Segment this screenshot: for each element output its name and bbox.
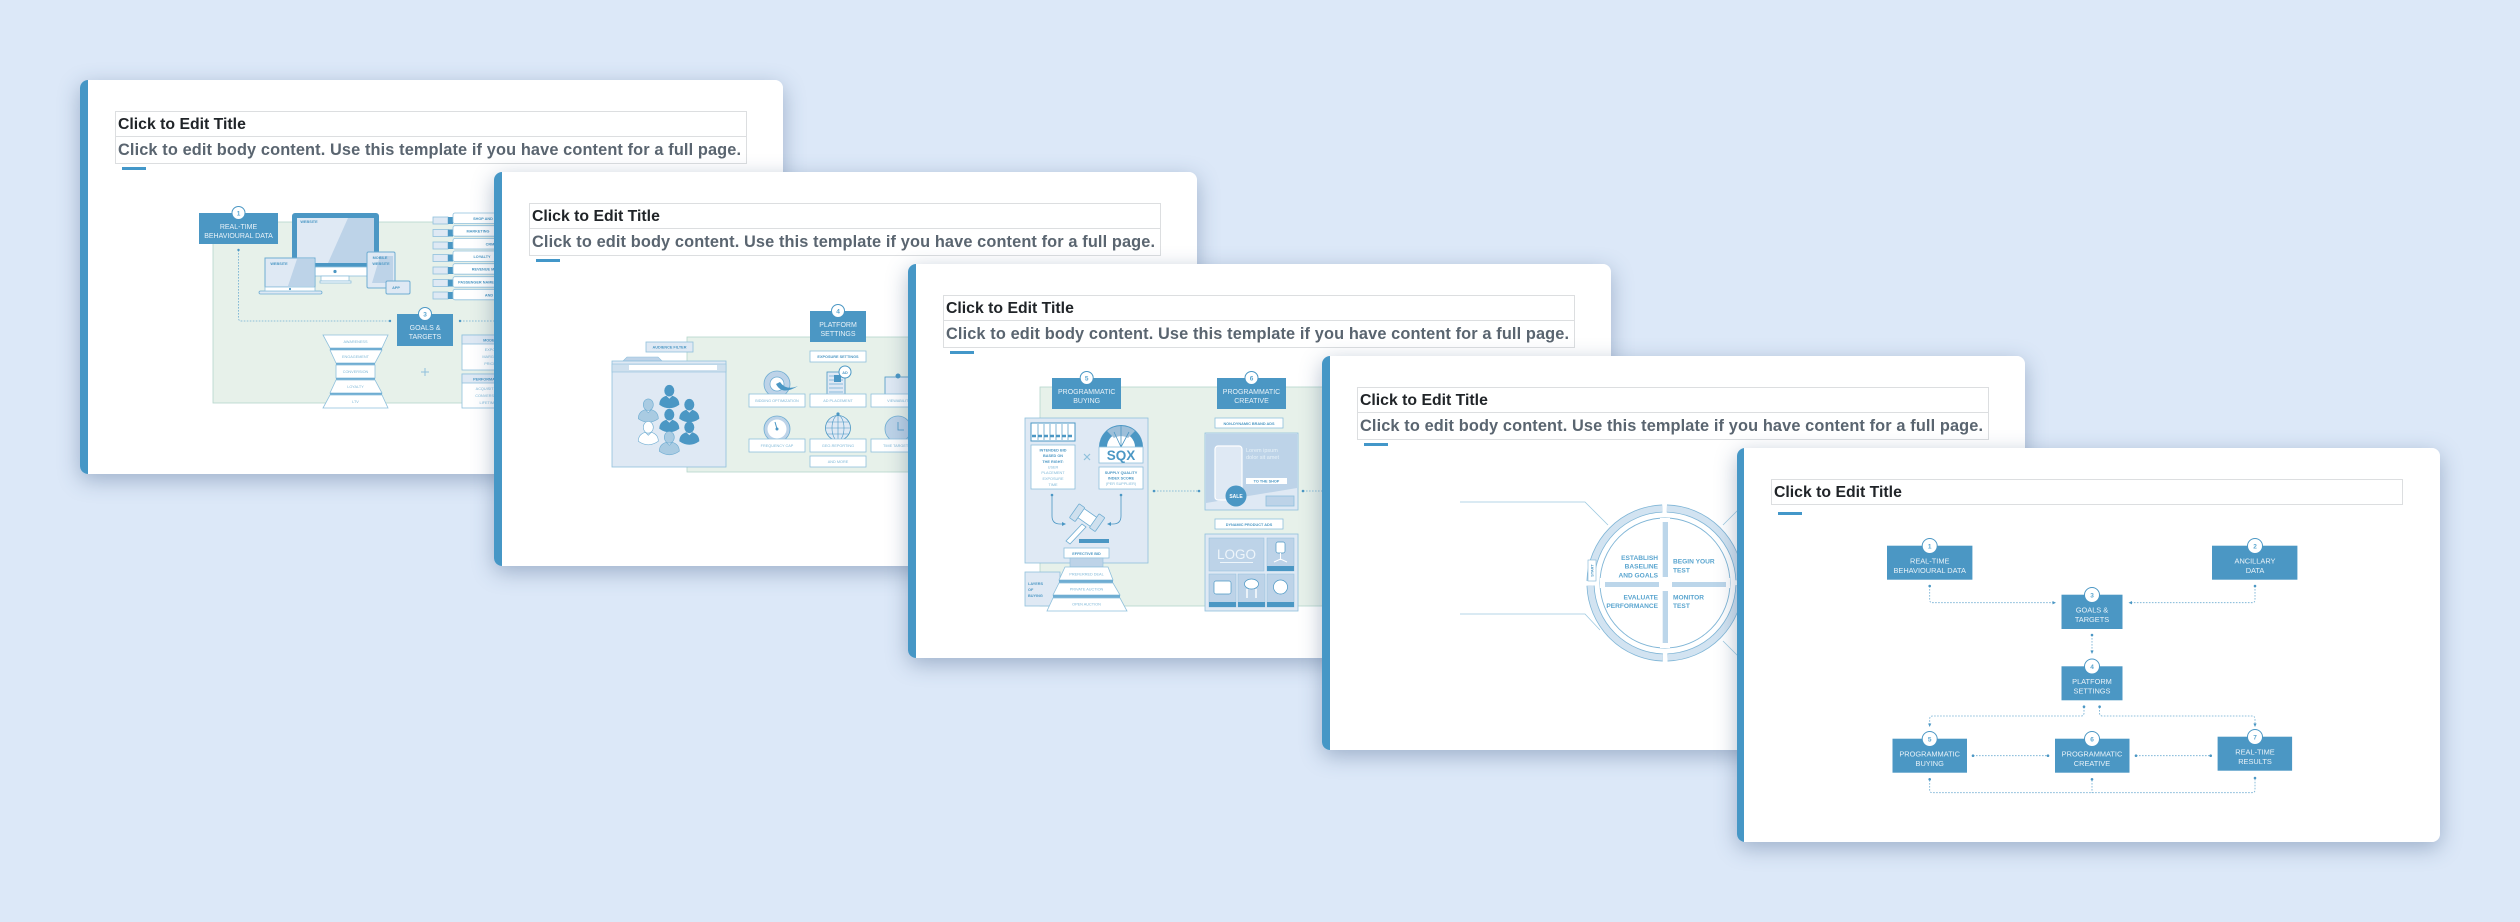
panel: brand ad mockup: Lorem ipsum: [1246, 448, 1278, 454]
box: programmatic creative: PROGRAMMATIC: [1223, 389, 1280, 396]
panel: slide 3 programmatic buying and creative: [908, 264, 1611, 658]
effective bid label: [1064, 548, 1109, 558]
icon: tablet and app phone: WEBSITE: [372, 262, 390, 266]
label: exposure settings: [810, 351, 866, 362]
box 1: real-time behavioural data: REAL-TIME: [1910, 556, 1949, 566]
icon: laptop: WEBSITE: [270, 262, 288, 266]
box: goals and targets: TARGETS: [409, 334, 442, 341]
icon: tablet and app phone: APP: [392, 286, 400, 290]
heading box: Click to Edit Title: [118, 116, 246, 133]
box: real-time behavioural data: [199, 206, 278, 244]
box 2: ancillary data: ANCILLARY: [2235, 556, 2276, 566]
box 2: ancillary data: 2: [2253, 544, 2257, 551]
box 1: real-time behavioural data: BEHAVIOURAL DATA: [1893, 566, 1966, 575]
quadrant: establish baseline and goals: [1618, 555, 1659, 579]
quadrant: monitor test: MONITOR: [1673, 594, 1704, 601]
box 6: programmatic creative: [2055, 732, 2130, 773]
intended bid box: BASED ON: [1043, 454, 1063, 458]
arrow: buying to creative: [1153, 490, 1325, 492]
effective bid label: EFFECTIVE BID: [1072, 552, 1101, 556]
setting labels row two and three: FREQUENCY CAP: [761, 444, 794, 448]
panel: slide 4 test cycle: [1322, 356, 2025, 750]
hourglass funnel: LOYALTY: [347, 385, 364, 389]
slide accent edge: [80, 80, 88, 474]
label: dynamic product ads: [1215, 519, 1283, 529]
tables: model and performance: ACQUISITION: [476, 387, 501, 391]
slide accent edge: [908, 264, 916, 658]
panel: product ad mockup: LOGO: [1217, 547, 1256, 562]
box 7: real-time results: 7: [2253, 735, 2257, 742]
tables: model and performance: EXPO: [485, 348, 495, 352]
tables: model and performance: LIFETIME: [479, 401, 497, 405]
panel: slide 4 shadow: [1322, 356, 2025, 750]
box 3: goals and targets: TARGETS: [2075, 615, 2109, 624]
connector: data inputs to goals: [1928, 585, 2256, 604]
box 5: programmatic buying: BUYING: [1916, 759, 1944, 768]
panel: brand ad mockup: TO THE SHOP: [1254, 479, 1280, 483]
intended bid box: INTENDED BID: [1039, 448, 1067, 452]
box 3: goals and targets: 3: [2090, 593, 2094, 600]
panel: slide 2 platform settings: [494, 172, 1197, 566]
quadrant: establish baseline and goals: BASELINE: [1625, 564, 1659, 571]
box: goals and targets: GOALS &: [410, 325, 441, 332]
box 1: real-time behavioural data: [1887, 538, 1972, 580]
quadrant: establish baseline and goals: AND GOALS: [1618, 572, 1659, 579]
panel: brand ad mockup: [1205, 433, 1298, 510]
heading box: [943, 295, 1575, 348]
box: platform settings: 4: [836, 308, 840, 316]
box: programmatic buying: PROGRAMMATIC: [1058, 389, 1115, 396]
icon: tablet and app phone: [367, 252, 410, 294]
connector: goals to platform: [2090, 634, 2094, 654]
green background panel: [1040, 387, 1440, 606]
multiply sign: [1084, 454, 1090, 460]
label: non-dynamic brand ads: [1215, 418, 1283, 428]
label: dynamic product ads: DYNAMIC PRODUCT ADS: [1226, 523, 1273, 527]
slide accent edge: [494, 172, 502, 566]
tables: model and performance: MODEL: [483, 338, 498, 342]
box: goals and targets: 3: [423, 312, 427, 318]
icon: laptop: [259, 258, 322, 294]
list: ancillary data sources: LOYALTY: [473, 255, 491, 259]
box 4: platform settings: 4: [2090, 664, 2094, 671]
box: programmatic buying: 5: [1085, 376, 1089, 382]
hourglass funnel: AWARENESS: [344, 340, 368, 344]
quadrant: establish baseline and goals: ESTABLISH: [1621, 555, 1658, 562]
slide accent edge: [1737, 448, 1744, 842]
panel: slide 1 shadow: [80, 80, 783, 474]
box 5: programmatic buying: PROGRAMMATIC: [1899, 750, 1961, 758]
quadrant: evaluate performance: EVALUATE: [1623, 594, 1659, 601]
layers of buying tab: OF: [1028, 588, 1034, 592]
setting labels row two and three: GEO-REPORTING: [822, 444, 854, 448]
box: programmatic creative: CREATIVE: [1234, 398, 1269, 405]
layers of buying tab: [1025, 572, 1060, 606]
box: real-time behavioural data: 1: [237, 210, 241, 218]
supply quality box: INDEX SCORE: [1108, 476, 1135, 480]
list: ancillary data sources: SHOP AND: [473, 217, 493, 221]
icon: ad placement document: [827, 366, 851, 396]
icon: SQX gauge: SQX: [1107, 448, 1135, 463]
arrow: data to goals: [237, 249, 500, 322]
buying pyramid: PRIVATE AUCTION: [1070, 588, 1104, 592]
quadrant: evaluate performance: PERFORMANCE: [1606, 603, 1659, 610]
icon: tablet and app phone: MOBILE: [373, 256, 388, 260]
buying pyramid: PREFERRED DEAL: [1069, 572, 1104, 576]
list: ancillary data sources: MARKETING: [466, 230, 490, 234]
accent underline: [122, 167, 146, 170]
box: programmatic buying: [1052, 372, 1121, 409]
intended bid box: USER: [1048, 466, 1059, 470]
plus sign: [421, 368, 429, 376]
quadrant: begin your test: BEGIN YOUR: [1673, 559, 1715, 566]
icon: abacus: [1031, 423, 1075, 441]
buying pyramid: [1047, 558, 1127, 611]
setting labels row two and three: AND MORE: [828, 460, 849, 464]
intended bid box: PLACEMENT: [1041, 471, 1065, 475]
intended bid box: EXPOSURE: [1042, 477, 1064, 481]
box 5: programmatic buying: [1892, 732, 1967, 773]
arrows into gavel: [1051, 494, 1122, 526]
cross dividers: [1600, 518, 1730, 648]
setting labels row one: AD PLACEMENT: [823, 399, 853, 403]
icon: gavel: [1066, 504, 1109, 544]
panel: buying logic: [1025, 418, 1148, 563]
hourglass funnel: ENGAGEMENT: [342, 355, 370, 359]
diagram: behavioural data and goals: [199, 206, 503, 408]
connector: platform to buying and results: [1928, 705, 2257, 727]
connector: feedback loop: [1928, 777, 2256, 793]
box 3: goals and targets: GOALS &: [2076, 606, 2108, 614]
audience people icons: [638, 385, 699, 455]
accent underline: [1778, 512, 1802, 515]
heading box: Click to edit body content. Use this template if you have content for a full page.: [118, 141, 741, 159]
box: programmatic creative: 6: [1250, 376, 1254, 382]
hourglass funnel: CONVERSION: [343, 370, 369, 374]
icon: globe: [826, 412, 850, 441]
box: programmatic creative: [1217, 372, 1286, 409]
connector: buying, creative, results: [1972, 754, 2212, 757]
heading box: Click to Edit Title: [1774, 484, 1902, 501]
list: ancillary data sources: AND: [485, 293, 493, 297]
supply quality box: [1099, 467, 1143, 489]
start ribbon: START: [1590, 564, 1594, 577]
list: ancillary data sources: REVENUE M: [472, 268, 494, 272]
box 4: platform settings: PLATFORM: [2072, 677, 2112, 686]
label: audience filter: [646, 342, 693, 352]
icon: desktop monitor: WEBSITE: [300, 220, 318, 224]
tables: model and performance: [462, 335, 522, 408]
box 6: programmatic creative: PROGRAMMATIC: [2062, 750, 2123, 758]
panel: slide 1 data overview: [80, 80, 783, 474]
setting labels row one: VIEWABILITY: [887, 399, 911, 403]
diagram: test cycle wheel: [1460, 502, 1737, 662]
box 7: real-time results: [2218, 730, 2292, 771]
panel: brand ad mockup: SALE: [1229, 494, 1243, 500]
slide accent edge: [1322, 356, 1330, 750]
supply quality box: (PER SUPPLIER): [1106, 482, 1137, 486]
quadrant: monitor test: TEST: [1673, 603, 1690, 610]
icon: clock: [885, 416, 911, 442]
callout lines: [1460, 502, 1740, 658]
wheel ring: [1590, 508, 1740, 658]
box 3: goals and targets: [2062, 588, 2122, 629]
box: platform settings: SETTINGS: [820, 331, 856, 338]
panel: brand ad mockup: dolor sit amet: [1246, 455, 1279, 461]
box: platform settings: PLATFORM: [819, 322, 857, 329]
heading box: Click to Edit Title: [1360, 392, 1488, 409]
icon: target: [764, 371, 798, 397]
hourglass funnel: LTV: [352, 400, 359, 404]
panel: slide 5 process flow: [1737, 448, 2440, 842]
box 6: programmatic creative: CREATIVE: [2074, 759, 2110, 768]
quadrant: begin your test: TEST: [1673, 567, 1690, 574]
heading box: Click to edit body content. Use this template if you have content for a full page.: [532, 233, 1155, 251]
setting labels row two and three: TIME TARGETING: [883, 444, 915, 448]
diagram: platform settings: [612, 304, 915, 472]
heading box: [1771, 479, 2403, 505]
tables: model and performance: PRICE: [484, 362, 496, 366]
quadrant: begin your test: [1673, 559, 1715, 574]
setting labels row one: BIDDING OPTIMIZATION: [755, 399, 799, 403]
label: non-dynamic brand ads: NON-DYNAMIC BRAND ADS: [1223, 422, 1275, 426]
box 7: real-time results: REAL-TIME: [2235, 748, 2275, 756]
box: real-time behavioural data: BEHAVIOURAL DATA: [204, 233, 273, 240]
accent underline: [950, 351, 974, 354]
box: platform settings: [810, 304, 866, 342]
heading box: [115, 111, 747, 164]
panel: slide 2 shadow: [494, 172, 1197, 566]
quadrant: evaluate performance: [1606, 594, 1659, 610]
box 6: programmatic creative: 6: [2090, 737, 2094, 744]
heading box: Click to edit body content. Use this template if you have content for a full page.: [1360, 417, 1983, 435]
heading box: [1357, 387, 1989, 440]
green background panel: [213, 222, 613, 403]
icon: desktop monitor: [292, 213, 379, 283]
panel: slide 5 shadow: [1737, 448, 2440, 842]
hourglass funnel: [323, 335, 388, 408]
heading box: Click to Edit Title: [946, 300, 1074, 317]
tables: model and performance: CONVERSION: [475, 394, 501, 398]
box 1: real-time behavioural data: 1: [1928, 544, 1932, 551]
list: ancillary data sources: CRM: [486, 242, 494, 246]
icon: frequency gauge: [764, 416, 790, 442]
heading box: Click to Edit Title: [532, 208, 660, 225]
start ribbon: [1588, 560, 1596, 581]
layers of buying tab: LAYERS: [1028, 582, 1044, 586]
list: ancillary data sources: PASSENGER NAME: [458, 280, 494, 284]
layers of buying tab: BUYING: [1028, 594, 1043, 598]
box 4: platform settings: [2062, 659, 2122, 700]
diagram: buying and creative: [1024, 371, 1322, 612]
diagram: process flow: [1887, 538, 2298, 794]
intended bid box: THE RIGHT:: [1042, 460, 1064, 464]
accent underline: [1364, 443, 1388, 446]
box 4: platform settings: SETTINGS: [2074, 686, 2111, 696]
list: ancillary data sources: [433, 213, 513, 300]
panel: slide 3 shadow: [908, 264, 1611, 658]
supply quality box: SUPPLY QUALITY: [1105, 471, 1138, 475]
tables: model and performance: PERFORMANCE: [473, 378, 503, 382]
panel: product ad mockup: [1205, 534, 1298, 611]
box: real-time behavioural data: REAL-TIME: [220, 224, 257, 231]
icon: ad placement document: AD: [842, 371, 848, 375]
box 2: ancillary data: [2212, 538, 2297, 580]
setting labels row two and three: [749, 439, 927, 467]
box 7: real-time results: RESULTS: [2238, 757, 2272, 766]
setting labels row one: [749, 394, 927, 407]
accent underline: [536, 259, 560, 262]
icon: SQX gauge: [1099, 425, 1143, 463]
tables: model and performance: MARGIN: [482, 355, 498, 359]
intended bid box: TIME: [1048, 483, 1058, 487]
browser window with audience: [612, 357, 726, 467]
label: audience filter: AUDIENCE FILTER: [653, 346, 687, 350]
icon: clipboard: [885, 374, 911, 397]
green background panel: [687, 337, 1087, 472]
label: exposure settings: EXPOSURE SETTINGS: [817, 355, 859, 359]
intended bid box: [1031, 445, 1075, 489]
box 2: ancillary data: DATA: [2246, 566, 2264, 575]
box 5: programmatic buying: 5: [1928, 737, 1932, 744]
heading box: [529, 203, 1161, 256]
quadrant: monitor test: [1673, 594, 1704, 610]
heading box: Click to edit body content. Use this template if you have content for a full page.: [946, 325, 1569, 343]
buying pyramid: OPEN AUCTION: [1072, 602, 1101, 606]
box: programmatic buying: BUYING: [1073, 398, 1100, 405]
box: goals and targets: [397, 308, 453, 346]
